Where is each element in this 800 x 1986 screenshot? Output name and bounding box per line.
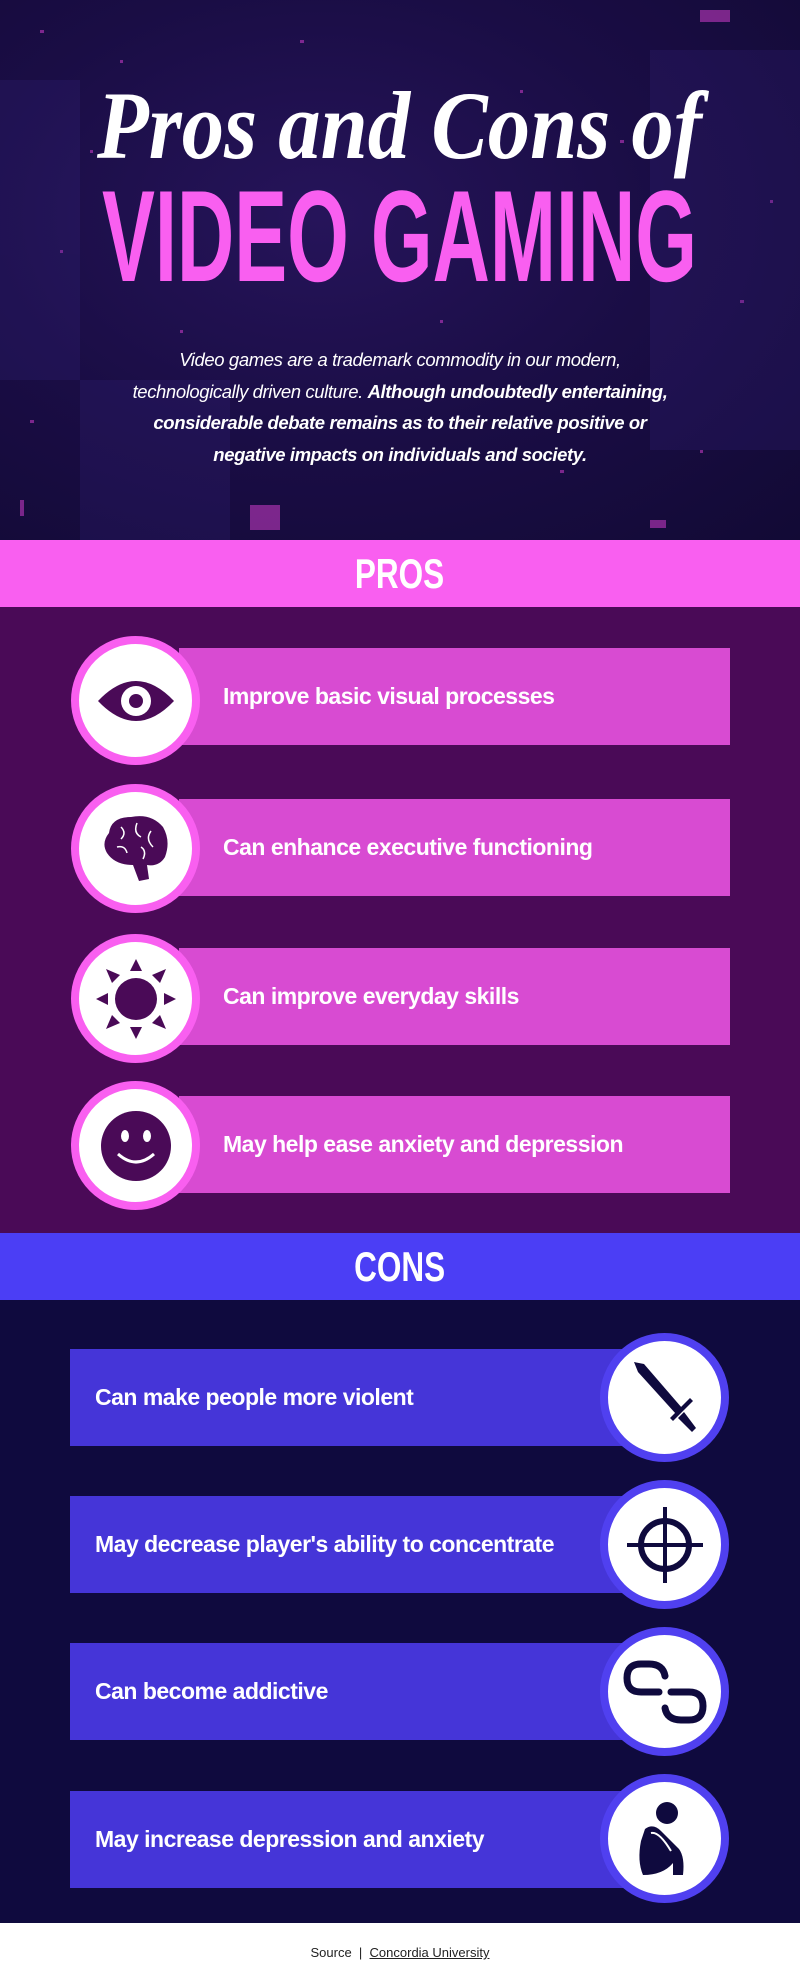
intro paragraph: considerable debate remains as to their relative positive or (153, 412, 647, 433)
icon: sword (600, 1333, 729, 1462)
con 2: May decrease player's ability to concentrate (95, 1531, 554, 1557)
con 1 (70, 1333, 729, 1462)
icon: sad person (600, 1774, 729, 1903)
con 3 (70, 1627, 729, 1756)
cons panel (0, 1300, 800, 1923)
cons band (0, 1233, 800, 1300)
pro 2: Can enhance executive functioning (223, 834, 592, 860)
source footer: Source | Concordia University (311, 1945, 489, 1960)
icon: chain (600, 1627, 729, 1756)
pros band (0, 540, 800, 607)
pro 1: Improve basic visual processes (223, 683, 554, 709)
pro 3 (71, 934, 730, 1063)
icon: brain (71, 784, 200, 913)
intro paragraph: negative impacts on individuals and society. (213, 444, 587, 464)
pro 3: Can improve everyday skills (223, 983, 519, 1009)
con 4: May increase depression and anxiety (95, 1826, 484, 1852)
title (96, 72, 709, 300)
intro paragraph: Video games are a trademark commodity in our modern, (179, 349, 621, 370)
con 1: Can make people more violent (95, 1384, 413, 1410)
pros band: PROS (355, 550, 445, 597)
title: Pros and Cons of (96, 72, 709, 179)
icon: sun (71, 934, 200, 1063)
con 2 (70, 1480, 729, 1609)
cons band: CONS (354, 1243, 446, 1290)
intro paragraph (133, 349, 667, 465)
icon: eye (71, 636, 200, 765)
pro 4: May help ease anxiety and depression (223, 1131, 623, 1157)
pros panel (0, 607, 800, 1233)
pro 1 (71, 636, 730, 765)
pro 2 (71, 784, 730, 913)
icon: smiley (71, 1081, 200, 1210)
con 4 (70, 1774, 729, 1903)
intro paragraph: technologically driven culture. Although undoubtedly entertaining, (133, 380, 667, 402)
con 3: Can become addictive (95, 1678, 328, 1704)
icon: crosshair (600, 1480, 729, 1609)
pro 4 (71, 1081, 730, 1210)
header background (0, 0, 800, 540)
